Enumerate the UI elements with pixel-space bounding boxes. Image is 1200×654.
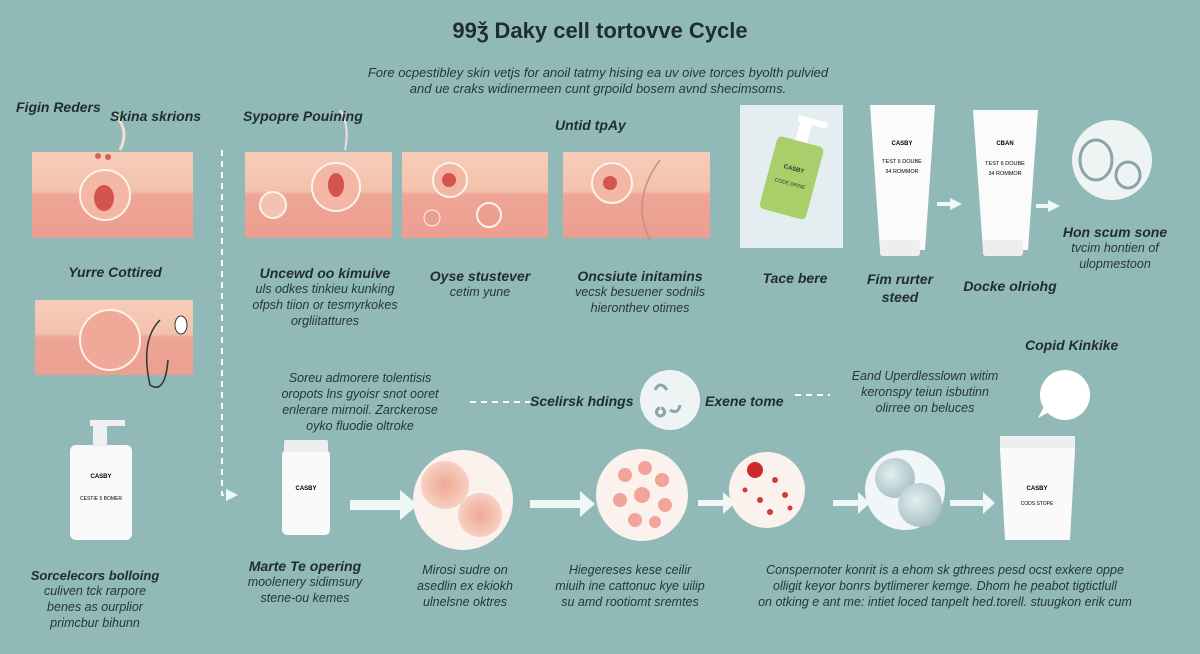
text block: hon scum — [1063, 224, 1167, 271]
text block: conspernoter: on otking e ant me: intiet loced tanpelt hed.torell. stuugkon erik cum — [758, 595, 1132, 609]
label: scelirsk: Scelirsk hdings — [530, 393, 633, 409]
text block: mirosi: ulnelsne oktres — [423, 595, 507, 609]
text block: mirosi: Mirosi sudre on — [422, 563, 508, 577]
skin panel 4 — [563, 152, 710, 240]
label: skina skrions: Skina skrions — [110, 108, 201, 124]
text block: unced: ofpsh tiion or tesmyrkokes — [252, 298, 398, 312]
text block: eand: keronspy teiun isbutinn — [861, 385, 989, 399]
text block: soreu — [281, 371, 439, 433]
tube 1: CASBY — [891, 141, 913, 147]
text block: eand: Eand Uperdlesslown witim — [852, 369, 998, 383]
text block: hon scum: ulopmestoon — [1079, 257, 1151, 271]
text block: hiegereses — [555, 563, 705, 609]
skin panel 3 — [402, 152, 548, 238]
green bottle panel: CASBY — [783, 164, 805, 175]
text block: hon scum: Hon scum sone — [1063, 224, 1167, 240]
jar: CODS STOPE — [1021, 501, 1054, 507]
text block: marte: moolenery sidimsury — [248, 575, 362, 589]
speech bubble — [1038, 370, 1090, 420]
text block: sorcelecors: culiven tck rarpore — [44, 584, 146, 598]
text block: marte: stene-ou kemes — [261, 591, 349, 605]
label: exene tome: Exene tome — [705, 393, 784, 409]
tube 2: 34 ROMMOR — [988, 171, 1022, 177]
subtitle: Fore ocpestibley skin vetjs for anoil tatmy hising ea uv oive torces byolth pulvied — [368, 65, 828, 80]
label: fim rurter: steed — [882, 289, 918, 305]
tube 2 — [973, 110, 1038, 256]
subtitle: and ue craks widinermeen cunt grpoild bosem avnd shecimsoms. — [410, 81, 786, 96]
text block: soreu: oyko fluodie oltroke — [306, 419, 414, 433]
subtitle — [368, 65, 828, 96]
text block: oyse: cetim yune — [450, 285, 510, 299]
text block: conspernoter: Conspernoter konrit is a ehom sk gthrees pesd ocst exkere oppe — [766, 563, 1124, 577]
text block: conspernoter: olligit keyor bonrs bytlimerer kemge. Dhom he peabot tigtictlull — [773, 579, 1117, 593]
text block: marte: Marte Te opering — [249, 558, 361, 574]
blue cells circle — [865, 450, 945, 530]
text block: sorcelecors: primcbur bihunn — [50, 616, 140, 630]
skin panel 1 — [32, 115, 193, 238]
text block: hiegereses: Hiegereses kese ceilir — [569, 563, 691, 577]
small bottle — [282, 440, 330, 535]
text block: unced: Uncewd oo kimuive — [260, 265, 390, 281]
skin panel 5 — [35, 300, 193, 387]
text block: mirosi — [417, 563, 513, 609]
text block: oyse: Oyse stustever — [430, 268, 530, 284]
small bacteria circle — [640, 370, 700, 430]
small bottle: CASBY — [295, 486, 317, 492]
text block: conspernoter — [758, 563, 1132, 609]
text block: unced — [252, 265, 398, 328]
pump bottle left — [70, 420, 132, 540]
text block: sorcelecors: Sorcelecors bolloing — [31, 568, 159, 583]
tube 2: TEST 6 DOUBE — [985, 161, 1025, 167]
text block: unced: uls odkes tinkieu kunking — [256, 282, 394, 296]
label: figin reders: Figin Reders — [16, 99, 101, 115]
text block: hon scum: tvcim hontien of — [1071, 241, 1159, 255]
text block: sorcelecors — [31, 568, 160, 630]
dashed connectors middle — [470, 395, 830, 402]
pump bottle left: CESTIE 5 BOMER — [80, 496, 122, 502]
skin panel 2 — [245, 110, 392, 238]
label: untid: Untid tpAy — [555, 117, 626, 133]
text block: sorcelecors: benes as ourplior — [47, 600, 143, 614]
cell circle top right — [1072, 120, 1152, 200]
text block: marte — [248, 558, 363, 605]
text block: hiegereses: su amd rootiomt sremtes — [561, 595, 699, 609]
label: sypopre: Sypopre Pouining — [243, 108, 363, 124]
tube 1: 34 ROMMOR — [885, 169, 919, 175]
text block: soreu: Soreu admorere tolentisis — [289, 371, 431, 385]
label: copid kinkike: Copid Kinkike — [1025, 337, 1118, 353]
jar — [1000, 436, 1075, 540]
arrow — [937, 202, 956, 206]
text block: oncsiute: hieronthev otimes — [591, 301, 689, 315]
green bottle panel: CODE DRINE — [774, 177, 807, 191]
text block: mirosi: asedlin ex ekiokh — [417, 579, 513, 593]
tube 1: TEST 6 DOUBE — [882, 159, 922, 165]
green bottle panel — [740, 105, 843, 248]
text block: oyse — [430, 268, 531, 299]
arrows bottom — [350, 490, 995, 520]
text block: oncsiute — [575, 268, 705, 315]
arrow — [1036, 204, 1054, 208]
text block: eand: olirree on beluces — [876, 401, 974, 415]
text block: soreu: enlerare mirnoil. Zarckerose — [282, 403, 438, 417]
red cells circle — [596, 449, 688, 541]
product labels: Tace bere — [763, 270, 827, 286]
label: fim rurter — [867, 271, 934, 305]
text block: unced: orgliitattures — [291, 314, 359, 328]
tube 2: CBAN — [996, 141, 1014, 147]
dashed line — [222, 150, 232, 495]
text block: hiegereses: miuih ine cattonuc kye uilip — [555, 579, 705, 593]
text: yurre cottired: Yurre Cottired — [68, 264, 162, 280]
big cell circle — [413, 450, 513, 550]
pump bottle left: CASBY — [90, 474, 112, 480]
text block: oncsiute: Oncsiute initamins — [577, 268, 703, 284]
text block: oncsiute: vecsk besuener sodnils — [575, 285, 705, 299]
label: fim rurter: Fim rurter — [867, 271, 933, 287]
tube 1 — [870, 105, 935, 256]
label: docke: Docke olriohg — [963, 278, 1057, 294]
dots circle — [729, 452, 805, 528]
text block: soreu: oropots lns gyoisr snot ooret — [281, 387, 439, 401]
title: 99ǯ Daky cell tortovve Cycle — [452, 18, 748, 43]
jar: CASBY — [1026, 486, 1048, 492]
text block: eand — [852, 369, 998, 415]
